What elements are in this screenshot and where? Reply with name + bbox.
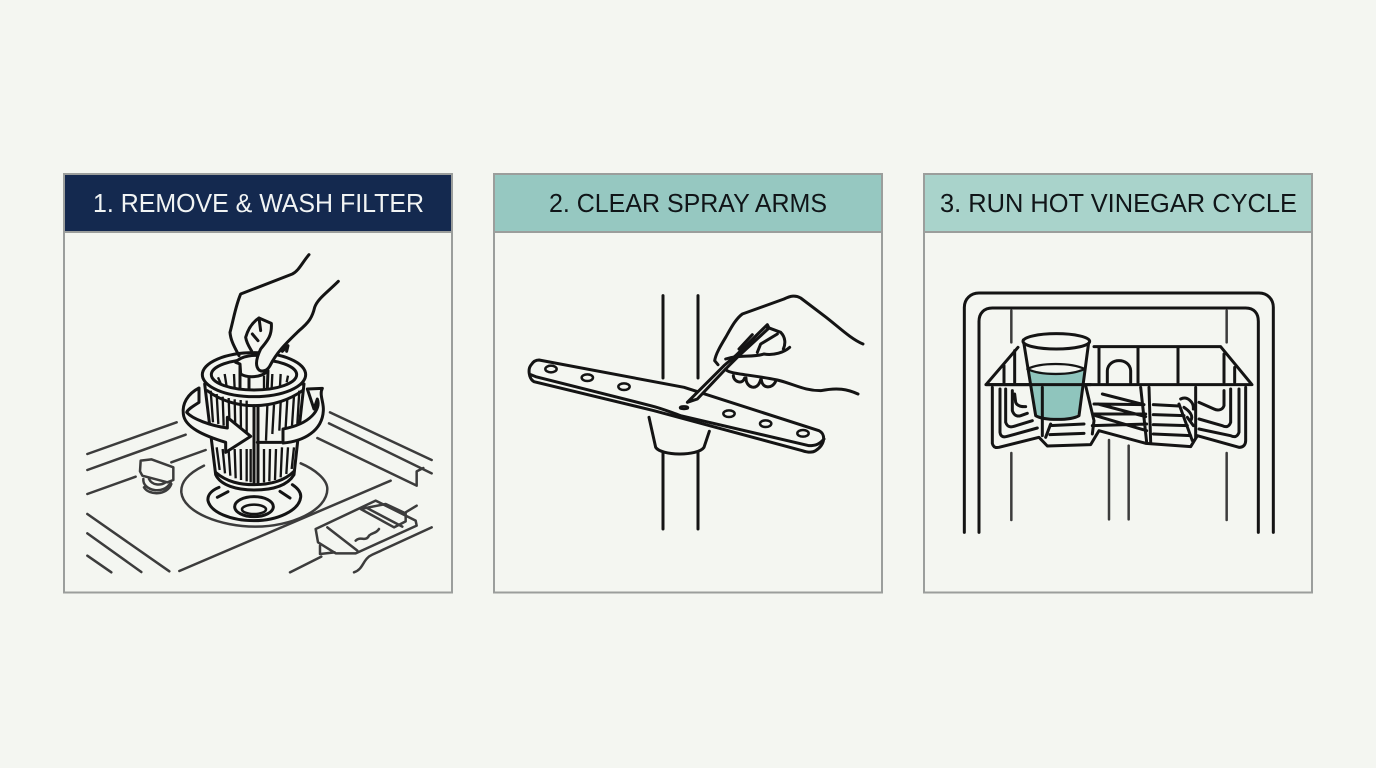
dish rack xyxy=(986,347,1252,448)
icon: mesh filter basket xyxy=(202,353,306,490)
spray arm hub xyxy=(649,417,709,454)
dishwasher floor lines xyxy=(87,412,432,572)
illustration: spray arm and pick xyxy=(529,296,863,529)
illustration: rack with vinegar cup xyxy=(964,293,1273,532)
spray arm bar xyxy=(529,360,824,452)
arrow: left rotation xyxy=(183,388,251,452)
icon: glass of vinegar xyxy=(986,334,1091,419)
icon: drain sump xyxy=(208,485,301,521)
vertical column xyxy=(663,296,698,529)
dishwasher interior frame xyxy=(964,293,1273,532)
icon: hand gripping filter xyxy=(230,255,338,371)
icon: hand holding pick xyxy=(687,296,863,402)
heading: step 1: 1. REMOVE & WASH FILTER xyxy=(93,188,424,218)
heading: step 3 xyxy=(924,174,1312,232)
heading: step 3: 3. RUN HOT VINEGAR CYCLE xyxy=(940,188,1297,218)
heading: step 2 xyxy=(494,174,882,232)
panel: step 2 clear spray arms xyxy=(494,174,882,592)
icon: spare detergent dispenser xyxy=(316,501,417,554)
panel: step 3 run hot vinegar cycle xyxy=(924,174,1312,592)
rack posts xyxy=(1011,311,1227,520)
arrow: right rotation xyxy=(283,388,323,443)
panel: step 1 remove and wash filter xyxy=(64,174,452,592)
heading: step 2: 2. CLEAR SPRAY ARMS xyxy=(549,188,827,218)
icon: removed cap xyxy=(140,459,173,493)
illustration: filter in dishwasher base xyxy=(87,255,432,572)
heading: step 1 xyxy=(64,174,452,232)
